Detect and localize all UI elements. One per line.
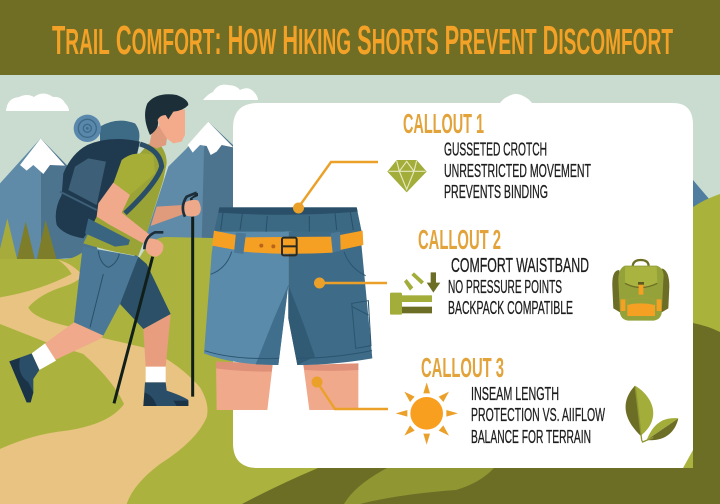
- callout 1 text: UNRESTRICTED MOVEMENT: [444, 160, 591, 181]
- callout 1 text: GUSSETED CROTCH: [444, 138, 547, 160]
- callout 2 text: [448, 255, 589, 318]
- torso: [83, 142, 167, 256]
- icon: backpack: [612, 260, 669, 321]
- callout 2 text: COMFORT WAISTBAND: [451, 255, 589, 277]
- cloud behind panel: [500, 94, 532, 103]
- far arm: [151, 193, 201, 226]
- pockets and hems: [205, 252, 372, 359]
- right hill: [693, 194, 720, 504]
- hiker: [9, 94, 201, 406]
- sleeping roll: [74, 115, 139, 143]
- waistband: [214, 207, 362, 232]
- trail: [0, 260, 207, 504]
- shorts crotch shadow: [288, 285, 315, 365]
- far right mountain: [693, 180, 710, 210]
- callout 3 text: [471, 383, 605, 447]
- icon: diamond: [387, 160, 427, 192]
- callout 2 text: NO PRESSURE POINTS: [448, 276, 562, 297]
- mountains right: [143, 122, 240, 243]
- trekking pole rear: [190, 193, 198, 397]
- lower hills: [242, 323, 720, 504]
- shorts illustration: [204, 207, 372, 410]
- rear leg: [143, 314, 188, 406]
- mountains left: [0, 138, 100, 260]
- icon: leaves: [626, 386, 678, 442]
- callout 3 text: PROTECTION VS. AIIFLOW: [471, 404, 605, 425]
- icon: sun: [396, 382, 458, 445]
- callout 1 text: PREVENTS BINDING: [444, 181, 548, 202]
- trekking pole front: [114, 257, 153, 403]
- callout 3 heading: CALLOUT 3: [421, 352, 504, 383]
- cloud left: [6, 94, 69, 111]
- connector callout 2: [314, 278, 387, 288]
- shorts right half: [288, 230, 372, 365]
- backpack: [56, 115, 140, 238]
- callout 3 text: INSEAM LENGTH: [471, 383, 559, 404]
- callout 3 text: BALANCE FOR TERRAIN: [471, 426, 591, 447]
- shorts left half: [204, 230, 288, 365]
- main pack: [56, 139, 140, 238]
- belt: [212, 231, 363, 255]
- hiker shorts: [74, 247, 171, 336]
- white panel: [233, 103, 693, 468]
- front arm and hand: [97, 183, 163, 257]
- head: [145, 94, 188, 148]
- pine trees: [0, 218, 57, 260]
- callout 1 heading: CALLOUT 1: [403, 108, 484, 139]
- shorts left shadow: [256, 285, 288, 365]
- cloud top: [203, 85, 258, 100]
- ground hills: [0, 237, 720, 504]
- callout 1 text: [444, 138, 591, 202]
- title bar: [0, 0, 720, 75]
- connector callout 3: [312, 376, 388, 409]
- callout 2 heading: CALLOUT 2: [418, 224, 501, 255]
- legs: [216, 362, 358, 410]
- callout 2 text: BACKPACK COMPATIBLE: [448, 297, 573, 318]
- connector callout 1: [293, 162, 378, 214]
- icon: waistband pressure: [390, 272, 440, 315]
- front leg and boot: [9, 322, 103, 402]
